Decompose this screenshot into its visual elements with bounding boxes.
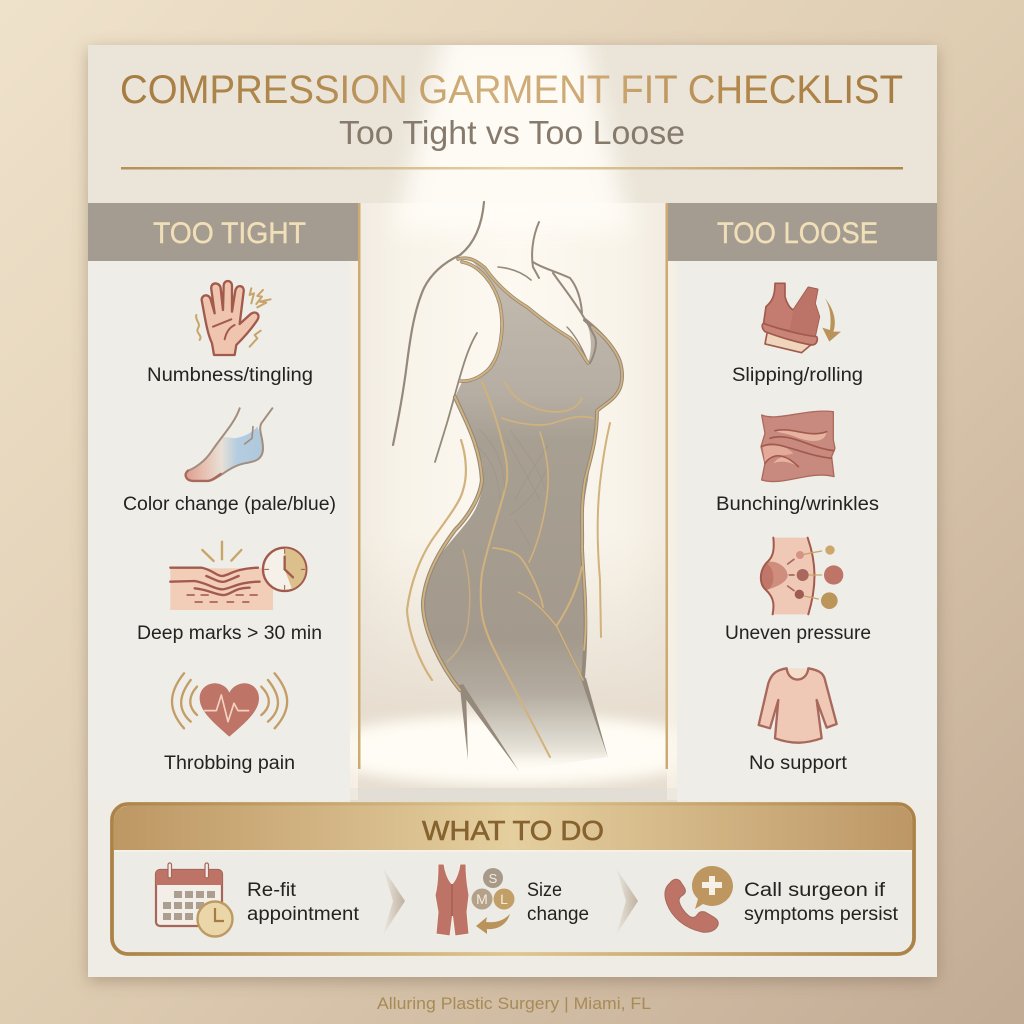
label: re-fit: Re-fit	[247, 880, 297, 901]
label: size change: change	[527, 904, 589, 925]
garment fill	[423, 258, 622, 770]
icon: loose shirt	[759, 668, 837, 743]
body figure in compression garment	[393, 202, 622, 771]
label: slipping: Slipping/rolling	[732, 365, 863, 386]
label: bunching: Bunching/wrinkles	[716, 494, 879, 515]
icon: size change: L	[500, 891, 508, 907]
icon: size change: S	[489, 871, 498, 886]
label: color change: Color change (pale/blue)	[123, 494, 336, 515]
panel: too loose	[666, 203, 937, 800]
label: call surgeon	[744, 880, 899, 925]
label: call surgeon: symptoms persist	[744, 904, 899, 925]
icon: size change	[435, 864, 514, 936]
label: no support: No support	[749, 753, 848, 774]
label: uneven pressure: Uneven pressure	[725, 623, 871, 644]
label: size change	[527, 880, 589, 925]
label: deep marks: Deep marks > 30 min	[137, 623, 322, 644]
label: throbbing pain: Throbbing pain	[164, 753, 295, 774]
arrow: step two to three	[616, 868, 638, 935]
icon: phone call with medical bubble	[665, 866, 733, 932]
heading: too loose: TOO LOOSE	[717, 217, 878, 250]
label: call surgeon: Call surgeon if	[744, 880, 886, 901]
label: re-fit	[247, 880, 360, 925]
icon: calendar with clock	[156, 863, 232, 936]
icon: bunched fabric	[761, 411, 835, 482]
footer credit: Alluring Plastic Surgery | Miami, FL	[377, 994, 651, 1013]
outline: gold seams	[407, 258, 622, 757]
icon: foot colour change	[186, 408, 272, 481]
icon: tingling hand	[196, 281, 271, 355]
heading: too tight: TOO TIGHT	[153, 217, 306, 250]
label: re-fit: appointment	[247, 904, 360, 925]
label: size change: Size	[527, 880, 562, 901]
subtitle: Too Tight vs Too Loose	[339, 114, 685, 151]
main card	[88, 30, 937, 977]
icon: uneven pressure	[761, 538, 843, 614]
arrow: step one to two	[383, 868, 405, 935]
icon: size change: M	[476, 891, 488, 907]
lace panel detail	[476, 430, 548, 545]
icon: throbbing heart	[172, 673, 287, 737]
icon: deep marks with clock	[170, 542, 306, 610]
what to do panel	[112, 804, 914, 954]
label: numbness: Numbness/tingling	[147, 365, 313, 386]
heading: what to do: WHAT TO DO	[422, 815, 604, 846]
panel: too tight	[88, 203, 360, 800]
tapered leg outlines	[456, 676, 608, 771]
icon: slipping top	[762, 283, 841, 353]
outline: taupe silhouette	[393, 202, 622, 690]
title block	[120, 68, 903, 170]
title: COMPRESSION GARMENT FIT CHECKLIST	[120, 68, 903, 112]
